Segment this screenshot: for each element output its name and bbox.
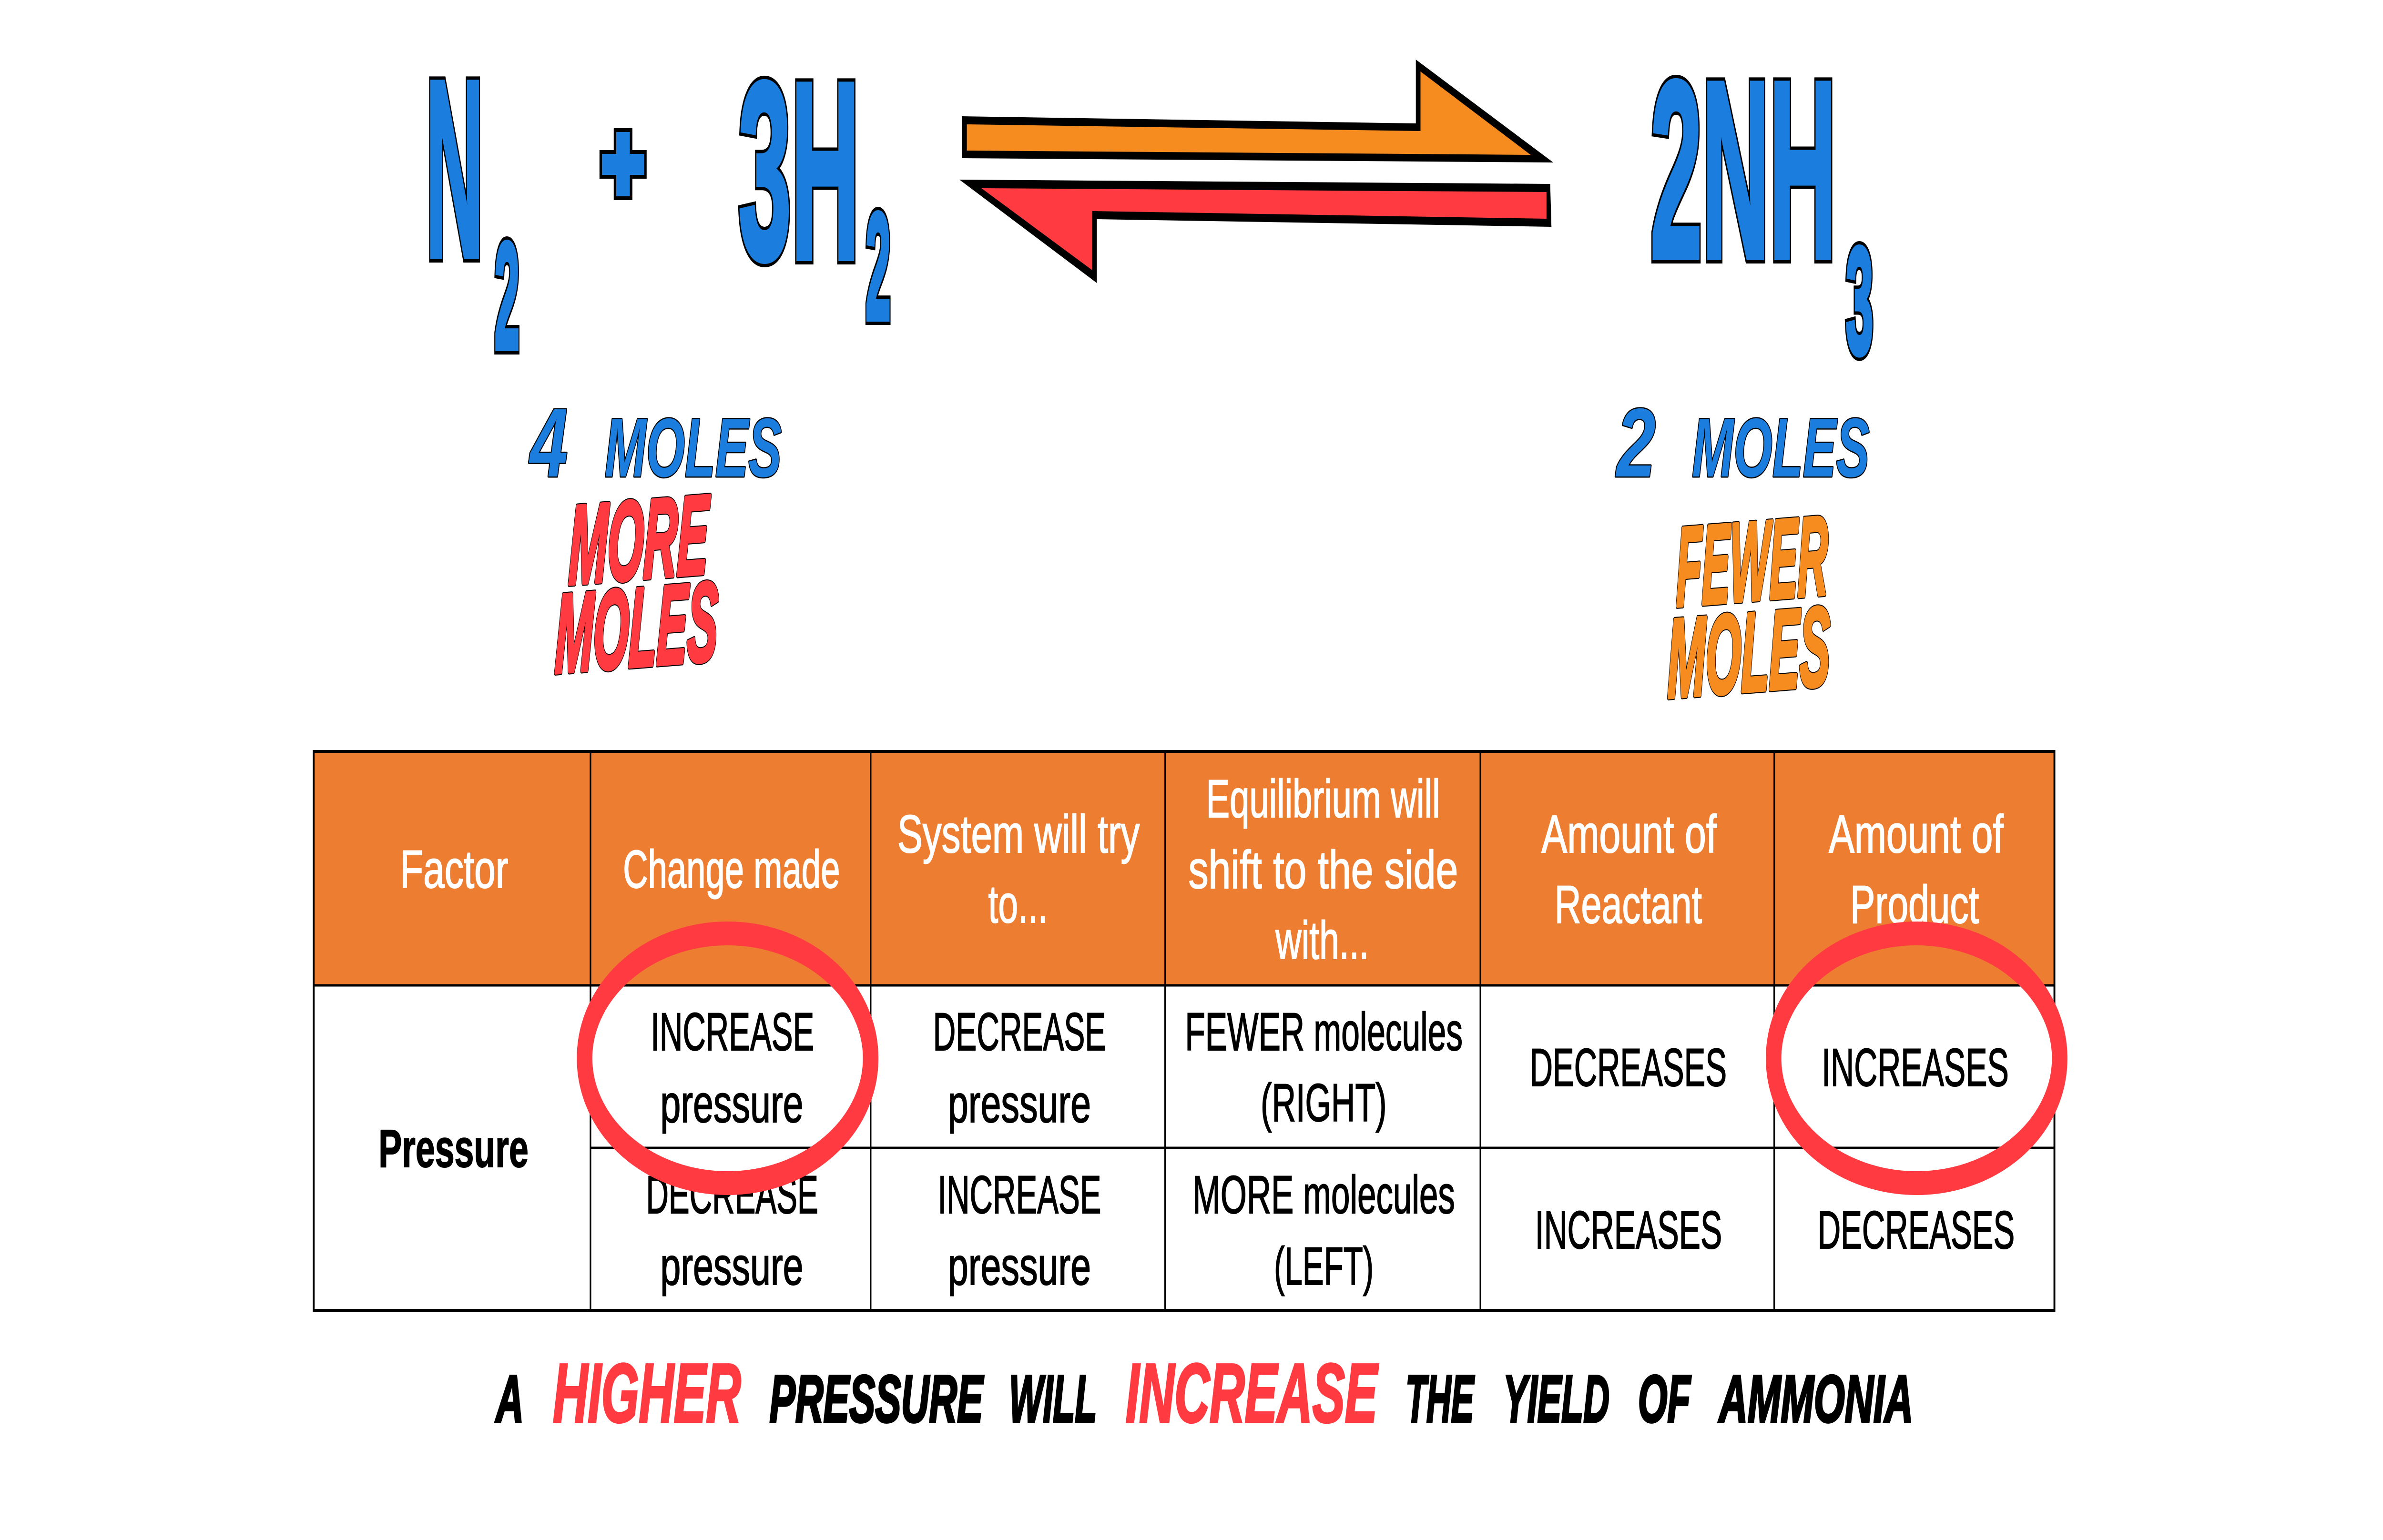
label: 2 moles [1615, 388, 1870, 497]
table row 1: pressure [948, 1074, 1091, 1134]
conclusion sentence: YIELD [1503, 1362, 1609, 1437]
table row 2: INCREASE [937, 1165, 1101, 1225]
table row 1: INCREASES [1822, 1038, 2009, 1098]
chemical equation: product 2NH3: 2NH [1650, 29, 1836, 311]
table header labels: Reactant [1555, 875, 1702, 935]
conclusion sentence: AMMONIA [1718, 1362, 1913, 1437]
conclusion sentence: INCREASE [1126, 1347, 1379, 1440]
N2 formula [426, 28, 519, 381]
table row 1: pressure [660, 1074, 804, 1134]
table header labels: Factor [400, 840, 508, 900]
callout: more moles: MORE [568, 472, 711, 608]
callout: fewer moles: FEWER [1676, 493, 1828, 630]
text: 2 [866, 182, 890, 351]
table header labels: Amount of [1541, 804, 1717, 864]
table row 2: DECREASE [646, 1165, 818, 1225]
text: 3 [1846, 216, 1873, 385]
table header labels: to... [988, 874, 1048, 934]
chemical equation: product 2NH3 [1650, 29, 1873, 385]
conclusion sentence: HIGHER [553, 1347, 741, 1440]
table header background [314, 751, 2055, 985]
table row 2: MORE molecules [1192, 1165, 1455, 1225]
text: 3 [1846, 216, 1873, 385]
highlight circle: product increases [1773, 933, 2060, 1183]
table header labels: Product [1850, 875, 1979, 935]
table header labels: Amount of [1829, 804, 2004, 864]
table [314, 751, 2055, 1310]
callout: fewer moles: MOLES [1668, 583, 1830, 722]
table header labels: with... [1275, 911, 1369, 971]
table grid [314, 751, 2055, 1310]
label: 4 moles [529, 388, 782, 497]
callout: fewer moles: FEWER [1676, 493, 1828, 630]
label: 4 moles: MOLES [605, 401, 782, 495]
callout: more moles: MORE [568, 472, 711, 608]
chemical equation: reactants: 2 [495, 211, 519, 381]
table row 2: DECREASES [1818, 1200, 2015, 1260]
3H2 formula: 3H [738, 30, 859, 312]
table header labels: Equilibrium will [1206, 769, 1440, 829]
conclusion sentence: THE [1405, 1362, 1475, 1437]
chemical equation: reactants: 2 [495, 211, 519, 381]
3H2 formula [738, 30, 890, 351]
table row 1 [651, 1002, 2009, 1134]
table row 1: DECREASE [933, 1002, 1106, 1062]
table row 2: (LEFT) [1274, 1236, 1374, 1297]
table row 1: (RIGHT) [1261, 1073, 1387, 1133]
highlight circle: increase pressure [585, 933, 871, 1183]
text: 2 [866, 182, 890, 351]
table header labels [400, 769, 2004, 971]
table header labels: System will try [897, 804, 1140, 864]
N2 formula: N [426, 28, 483, 310]
conclusion sentence: A [495, 1362, 524, 1437]
3H2 formula: 3H [738, 30, 859, 312]
N2 formula: N [426, 28, 483, 310]
table row 2 [646, 1165, 2015, 1297]
reverse arrow, red [959, 180, 1551, 283]
callout: more moles: MOLES [554, 558, 720, 697]
callout: more moles [554, 472, 720, 697]
chemical equation: reactants [426, 28, 890, 381]
conclusion sentence: PRESSURE [770, 1362, 984, 1437]
table row 2: pressure [660, 1236, 804, 1297]
table header labels: Change made [623, 840, 840, 900]
conclusion sentence [495, 1347, 1913, 1440]
table row 1: INCREASE [651, 1002, 814, 1062]
table row 2: pressure [948, 1236, 1091, 1297]
table row 1: FEWER molecules [1185, 1002, 1463, 1062]
callout: more moles: MOLES [554, 558, 720, 697]
callout: fewer moles [1668, 493, 1830, 722]
conclusion sentence: WILL [1009, 1362, 1097, 1437]
table header labels: shift to the side [1188, 840, 1458, 900]
conclusion sentence: OF [1638, 1362, 1691, 1437]
equilibrium arrows [959, 60, 1553, 283]
forward arrow, orange [962, 60, 1553, 162]
chemical equation: product 2NH3: 2NH [1650, 29, 1836, 311]
label: 2 moles: MOLES [1692, 401, 1870, 495]
label: 2 moles: 2 [1615, 388, 1656, 497]
table row 2: INCREASES [1535, 1200, 1722, 1260]
table row 1: DECREASES [1530, 1038, 1727, 1098]
plus sign [601, 130, 645, 198]
row label: pressure: Pressure [378, 1119, 529, 1179]
label: 4 moles: 4 [529, 388, 568, 497]
callout: fewer moles: MOLES [1668, 583, 1830, 722]
